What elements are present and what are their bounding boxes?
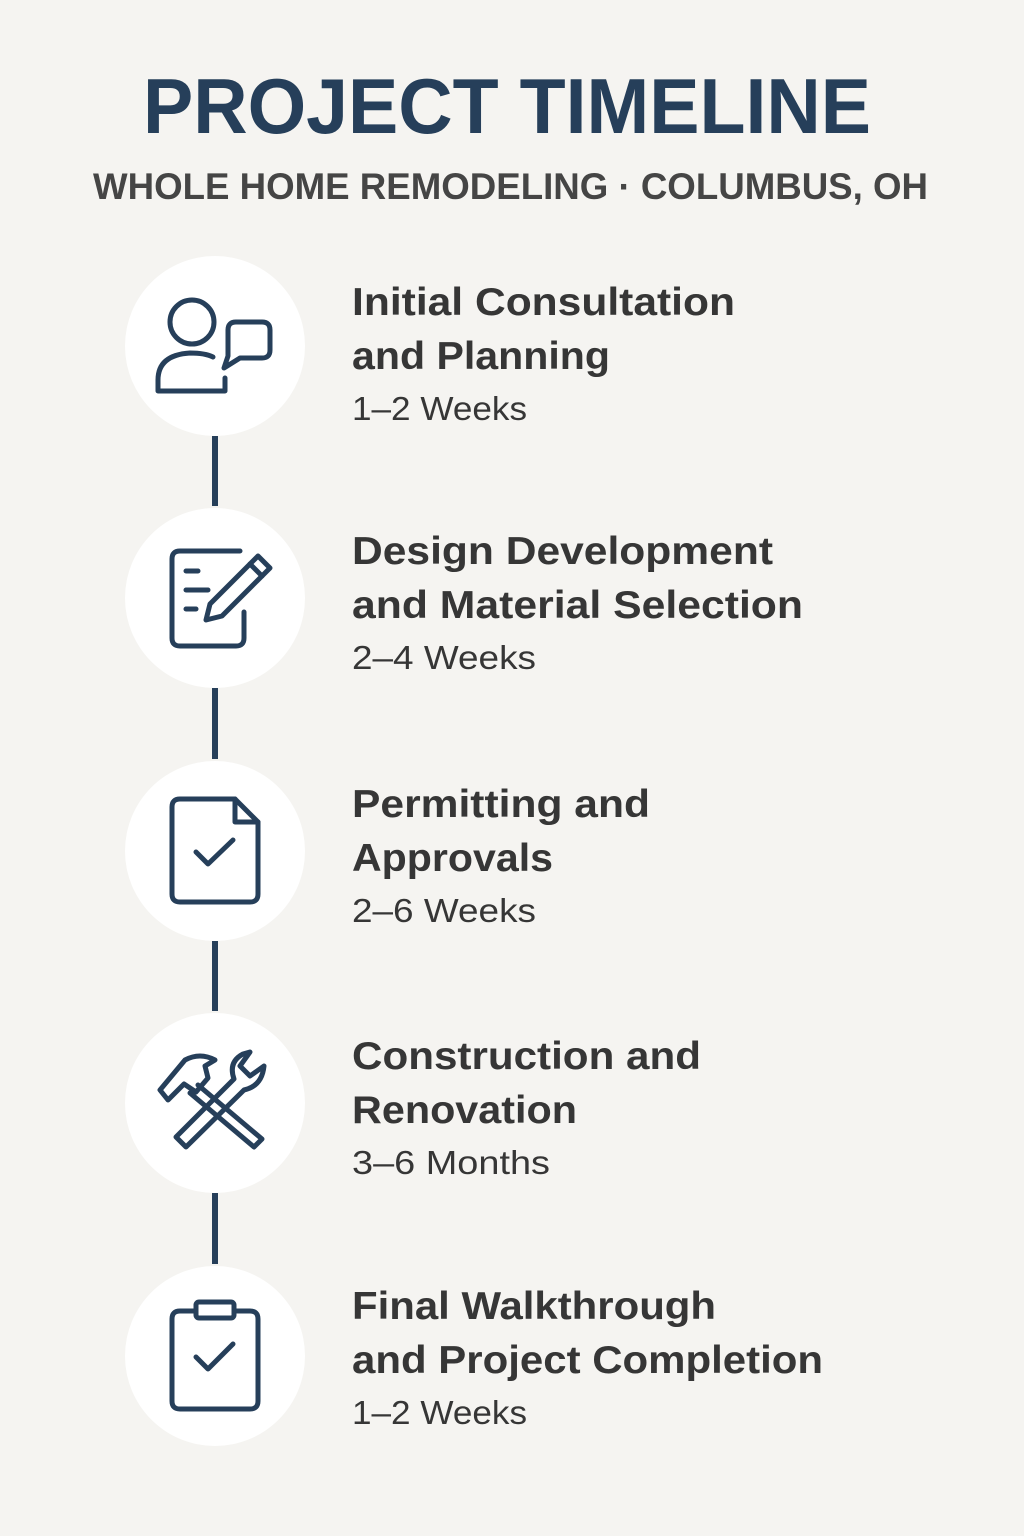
step 4: Renovation [352, 1089, 577, 1132]
title: PROJECT TIMELINE [143, 62, 871, 150]
step 1: and Planning [352, 335, 610, 378]
text: step 1: Initial Consultation [352, 281, 735, 324]
step 3: Approvals [352, 837, 553, 880]
step 4: 3–6 Months [352, 1144, 550, 1181]
text: step 4: Construction and [352, 1035, 701, 1078]
text: step 2: Design Development [352, 530, 773, 573]
step 3: 2–6 Weeks [352, 892, 536, 929]
step 5: 1–2 Weeks [352, 1394, 527, 1431]
subtitle: WHOLE HOME REMODELING · COLUMBUS, OH [93, 166, 928, 207]
step 2 [125, 508, 803, 688]
connectors [212, 436, 218, 1264]
icon: document with check [125, 761, 305, 941]
text: step 5: Final Walkthrough [352, 1285, 716, 1328]
icon: person with speech bubble [125, 256, 305, 436]
icon: document with pencil [125, 508, 305, 688]
step 5 [125, 1266, 823, 1446]
step 2: 2–4 Weeks [352, 639, 536, 676]
step 1 [125, 256, 735, 436]
icon: clipboard with check [125, 1266, 305, 1446]
step 5: and Project Completion [352, 1339, 823, 1382]
step 2: and Material Selection [352, 584, 803, 627]
text: step 3: Permitting and [352, 783, 650, 826]
step 3 [125, 761, 650, 941]
step 1: 1–2 Weeks [352, 390, 527, 427]
icon: hammer and wrench [125, 1013, 305, 1193]
step 4 [125, 1013, 701, 1193]
